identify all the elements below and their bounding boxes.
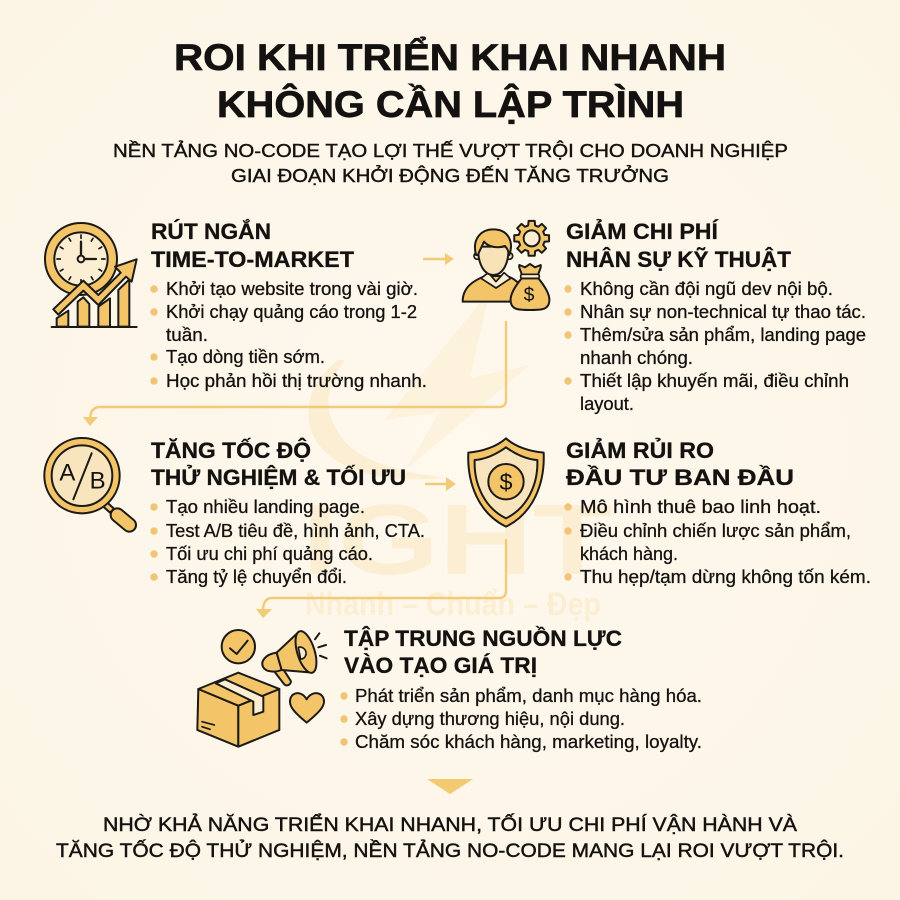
heading: VÀO TẠO GIÁ TRỊ (344, 653, 537, 678)
icon: person, gear and money bag: $ (524, 285, 535, 306)
bullet list: Test A/B tiêu đề, hình ảnh, CTA. (166, 520, 425, 541)
bullet list: nhanh chóng. (580, 347, 693, 368)
bullet list: Tối ưu chi phí quảng cáo. (166, 543, 373, 564)
heading: RÚT NGẮN (151, 219, 271, 244)
conclusion text: TĂNG TỐC ĐỘ THỬ NGHIỆM, NỀN TẢNG NO-CODE MANG LẠI ROI VƯỢT TRỘI. (56, 840, 844, 862)
heading (151, 219, 355, 272)
bullet list (150, 278, 427, 391)
bullet list: Thiết lập khuyến mãi, điều chỉnh (580, 370, 849, 391)
connector: step 2 to step 3 (83, 322, 506, 426)
subtitle: GIAI ĐOẠN KHỞI ĐỘNG ĐẾN TĂNG TRƯỞNG (231, 165, 669, 186)
panel: giảm chi phí nhân sự kỹ thuật (564, 219, 866, 414)
bullet list: Phát triển sản phẩm, danh mục hàng hóa. (355, 685, 702, 706)
icon: person, gear and money bag (463, 221, 549, 310)
heading: TẬP TRUNG NGUỒN LỰC (344, 626, 622, 651)
panel: tập trung nguồn lực (340, 626, 702, 752)
arrow: step 3 to step 4 (426, 477, 456, 491)
conclusion text (56, 814, 844, 862)
bullet list: Học phản hồi thị trường nhanh. (166, 370, 427, 391)
watermark logo: Nhanh – Chuẩn – Đẹp (305, 586, 601, 622)
heading: ĐẦU TƯ BAN ĐẦU (566, 465, 794, 490)
panel: tăng tốc độ thử nghiệm và tối ưu (150, 437, 425, 587)
title: KHÔNG CẦN LẬP TRÌNH (217, 83, 684, 125)
heading: GIẢM CHI PHÍ (566, 219, 719, 244)
bullet list: Xây dựng thương hiệu, nội dung. (355, 708, 625, 729)
subtitle: NỀN TẢNG NO-CODE TẠO LỢI THẾ VƯỢT TRỘI CHO DOANH NGHIỆP (113, 140, 788, 161)
icon: A/B magnifier: A (59, 460, 75, 487)
bullet list: Thu hẹp/tạm dừng không tốn kém. (580, 566, 871, 587)
watermark logo (302, 290, 612, 622)
bullet list: khách hàng. (580, 543, 678, 564)
bullet list: layout. (580, 393, 634, 414)
icon: A/B magnifier: B (90, 468, 106, 495)
title (174, 36, 726, 125)
bullet list: Khởi chạy quảng cáo trong 1-2 (166, 301, 417, 322)
icon: box, megaphone, check and heart (197, 629, 327, 747)
bullet list (564, 278, 866, 414)
bullet list: Tăng tỷ lệ chuyển đổi. (166, 566, 347, 587)
subtitle (113, 140, 788, 186)
icon: downward triangle (427, 779, 473, 794)
heading: THỬ NGHIỆM & TỐI ƯU (151, 464, 406, 490)
heading (344, 626, 622, 678)
heading: NHÂN SỰ KỸ THUẬT (566, 247, 792, 272)
bullet list (340, 685, 702, 752)
icon: shield with dollar: $ (500, 469, 513, 495)
panel: giảm rủi ro đầu tư ban đầu (564, 438, 871, 587)
panel: rút ngắn time-to-market (150, 219, 427, 391)
bullet list: Nhân sự non-technical tự thao tác. (580, 301, 866, 322)
heading (566, 219, 792, 272)
conclusion text: NHỜ KHẢ NĂNG TRIỂN KHAI NHANH, TỐI ƯU CHI PHÍ VẬN HÀNH VÀ (103, 814, 797, 836)
bullet list: Điều chỉnh chiến lược sản phẩm, (580, 520, 851, 541)
bullet list: Tạo dòng tiền sớm. (166, 346, 325, 367)
heading: GIẢM RỦI RO (566, 438, 714, 463)
watermark logo: IGHT (302, 484, 612, 596)
bullet list: Chăm sóc khách hàng, marketing, loyalty. (355, 731, 702, 752)
heading (151, 437, 406, 490)
bullet list: Thêm/sửa sản phẩm, landing page (580, 324, 866, 345)
heading: TĂNG TỐC ĐỘ (151, 437, 311, 463)
bullet list (564, 496, 871, 587)
bullet list: tuần. (166, 324, 208, 345)
icon: A/B magnifier (44, 438, 129, 525)
icon: clock with growth chart (45, 223, 137, 327)
bullet list: Tạo nhiều landing page. (166, 496, 365, 517)
bullet list: Khởi tạo website trong vài giờ. (166, 278, 418, 299)
connector: step 4 to step 5 (256, 540, 506, 618)
bullet list: Mô hình thuê bao linh hoạt. (580, 496, 821, 517)
title: ROI KHI TRIỂN KHAI NHANH (174, 36, 726, 78)
bullet list: Không cần đội ngũ dev nội bộ. (580, 278, 833, 299)
arrow: step 1 to step 2 (424, 253, 454, 265)
icon: shield with dollar (468, 438, 544, 527)
heading: TIME-TO-MARKET (151, 247, 355, 272)
bullet list (150, 496, 425, 587)
heading (566, 438, 794, 490)
